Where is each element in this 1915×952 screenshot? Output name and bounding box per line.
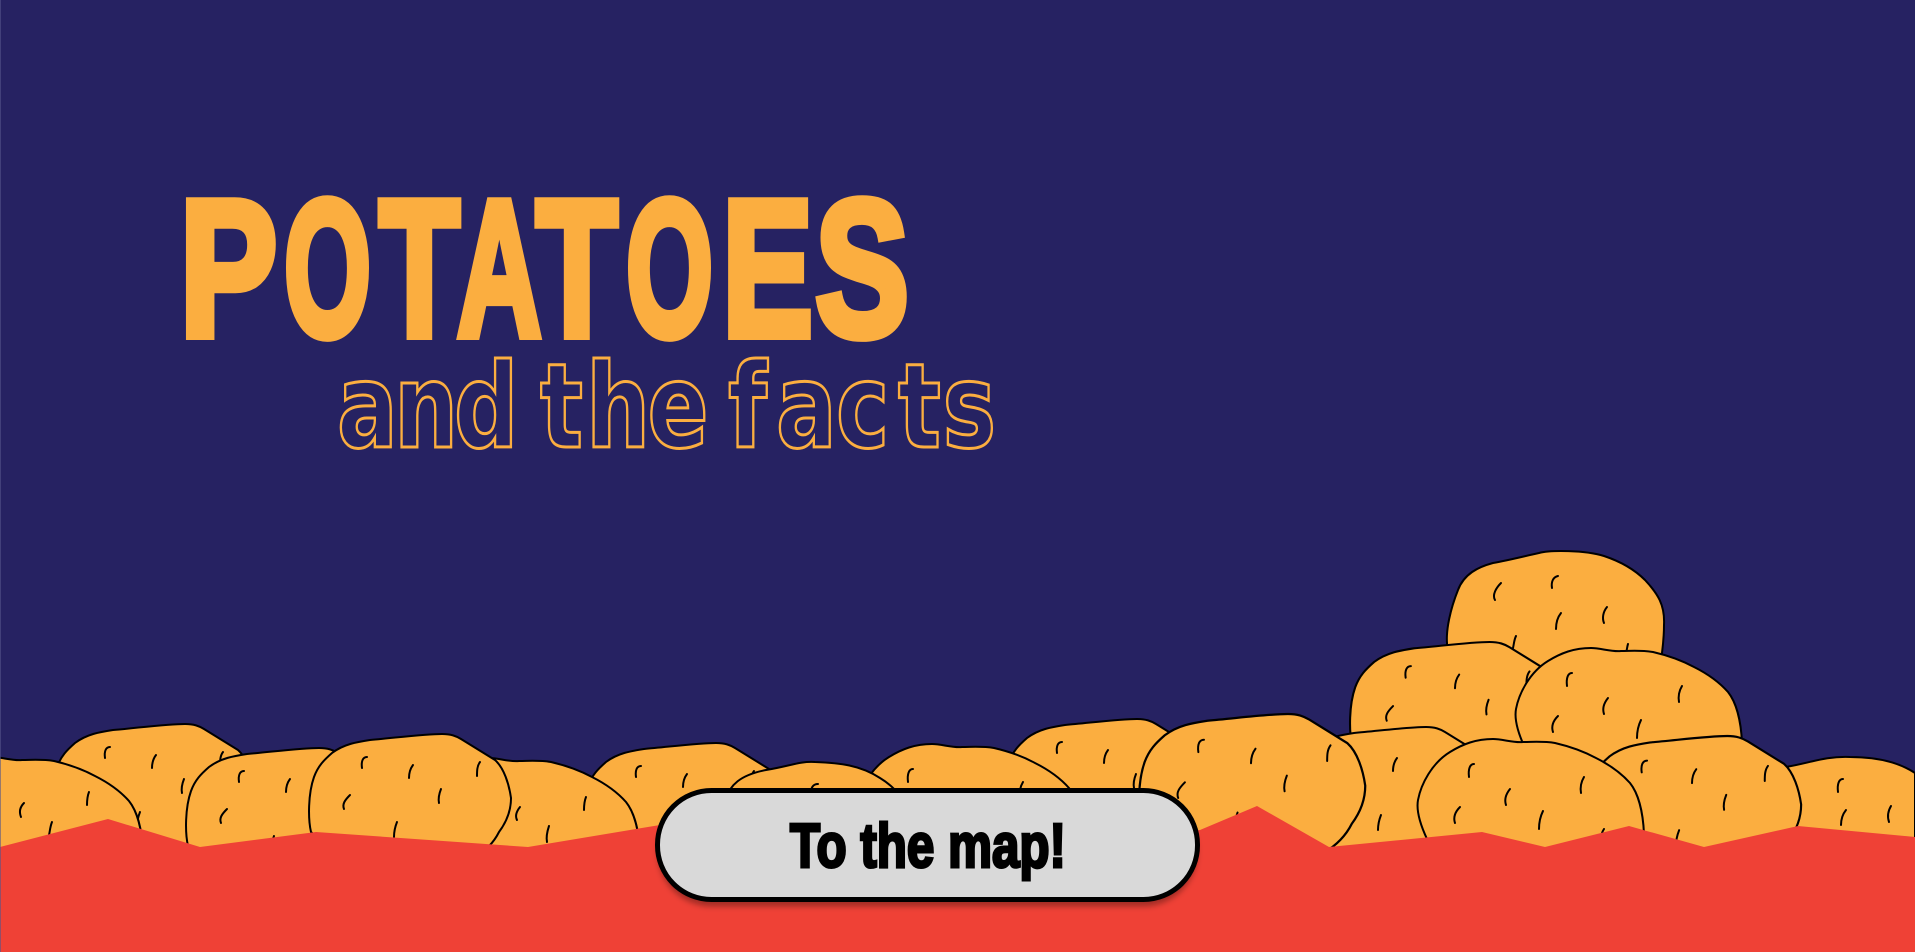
red ground	[0, 806, 1915, 952]
potato pile: ground row	[0, 551, 1915, 893]
potato: far right	[1780, 757, 1915, 860]
potato: large front	[1139, 714, 1365, 860]
potato: centre dome	[856, 744, 1083, 879]
button: to the map	[658, 790, 1198, 906]
subtitle: and the facts: and the facts	[337, 338, 996, 475]
potato: left third	[413, 758, 640, 893]
title: POTATOES: O	[626, 160, 713, 376]
potato: left front	[309, 734, 511, 864]
potato: front dome	[1417, 739, 1644, 874]
title: POTATOES: E	[723, 160, 813, 376]
potato: front right	[1585, 736, 1801, 876]
title: POTATOES: A	[458, 160, 541, 376]
potato: stack third row back	[1293, 727, 1495, 857]
title: POTATOES: S	[816, 160, 909, 376]
potato: far left	[0, 757, 143, 892]
title: POTATOES: P	[180, 160, 277, 376]
title: POTATOES: T	[379, 160, 459, 376]
potato: stack top	[1447, 551, 1664, 720]
potato: stack second row left	[1350, 642, 1562, 779]
potato: stack second row right	[1515, 648, 1742, 783]
potato: centre back	[583, 743, 785, 873]
potato: centre small	[725, 762, 905, 860]
potato: centre right	[1004, 719, 1206, 849]
potato: left second	[186, 748, 388, 878]
title: POTATOES: T	[536, 160, 617, 376]
title: POTATOES: O	[284, 160, 371, 376]
potato: back left	[52, 724, 254, 854]
button label: To the map!	[790, 812, 1066, 881]
left edge line	[0, 0, 1, 952]
